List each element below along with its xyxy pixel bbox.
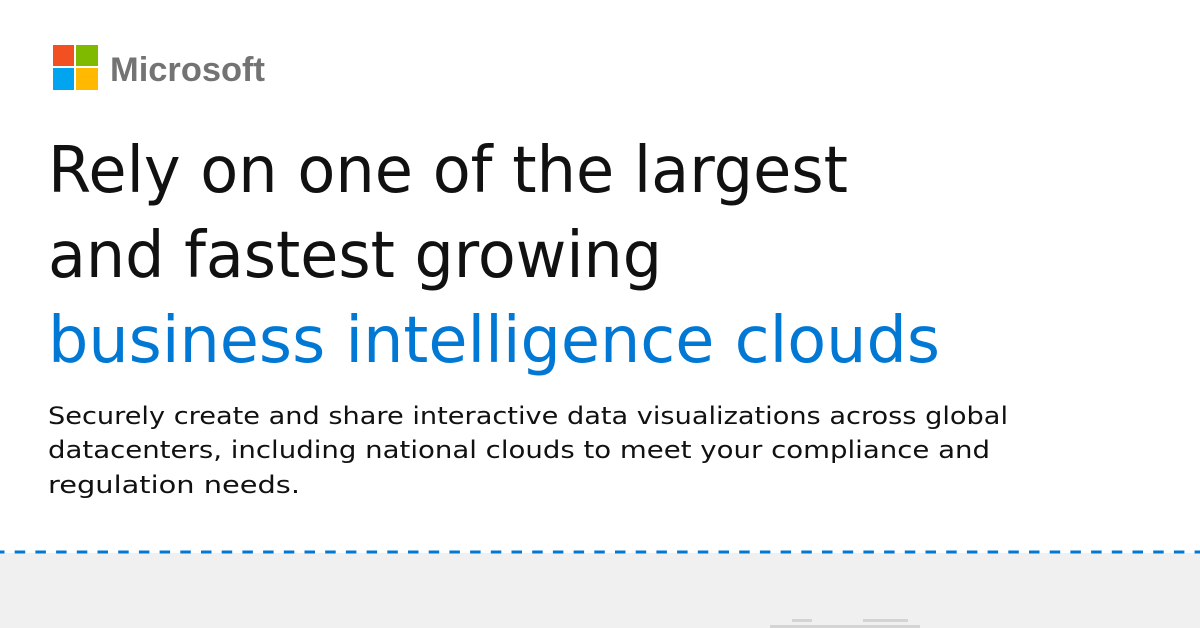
bottom grey band — [0, 553, 1200, 628]
subtitle text: regulation needs. — [48, 471, 300, 499]
title: and fastest growing — [48, 219, 662, 293]
title: business intelligence clouds — [48, 304, 940, 378]
logo: Microsoft — [53, 45, 265, 90]
subtitle text: datacenters, including national clouds to meet your compliance and — [48, 436, 990, 464]
subtitle text — [48, 402, 1008, 499]
title — [48, 134, 940, 378]
logo: Microsoft: Microsoft — [110, 51, 265, 89]
map dots hint — [770, 619, 920, 628]
title: Rely on one of the largest — [48, 134, 848, 208]
subtitle text: Securely create and share interactive data visualizations across global — [48, 402, 1008, 430]
